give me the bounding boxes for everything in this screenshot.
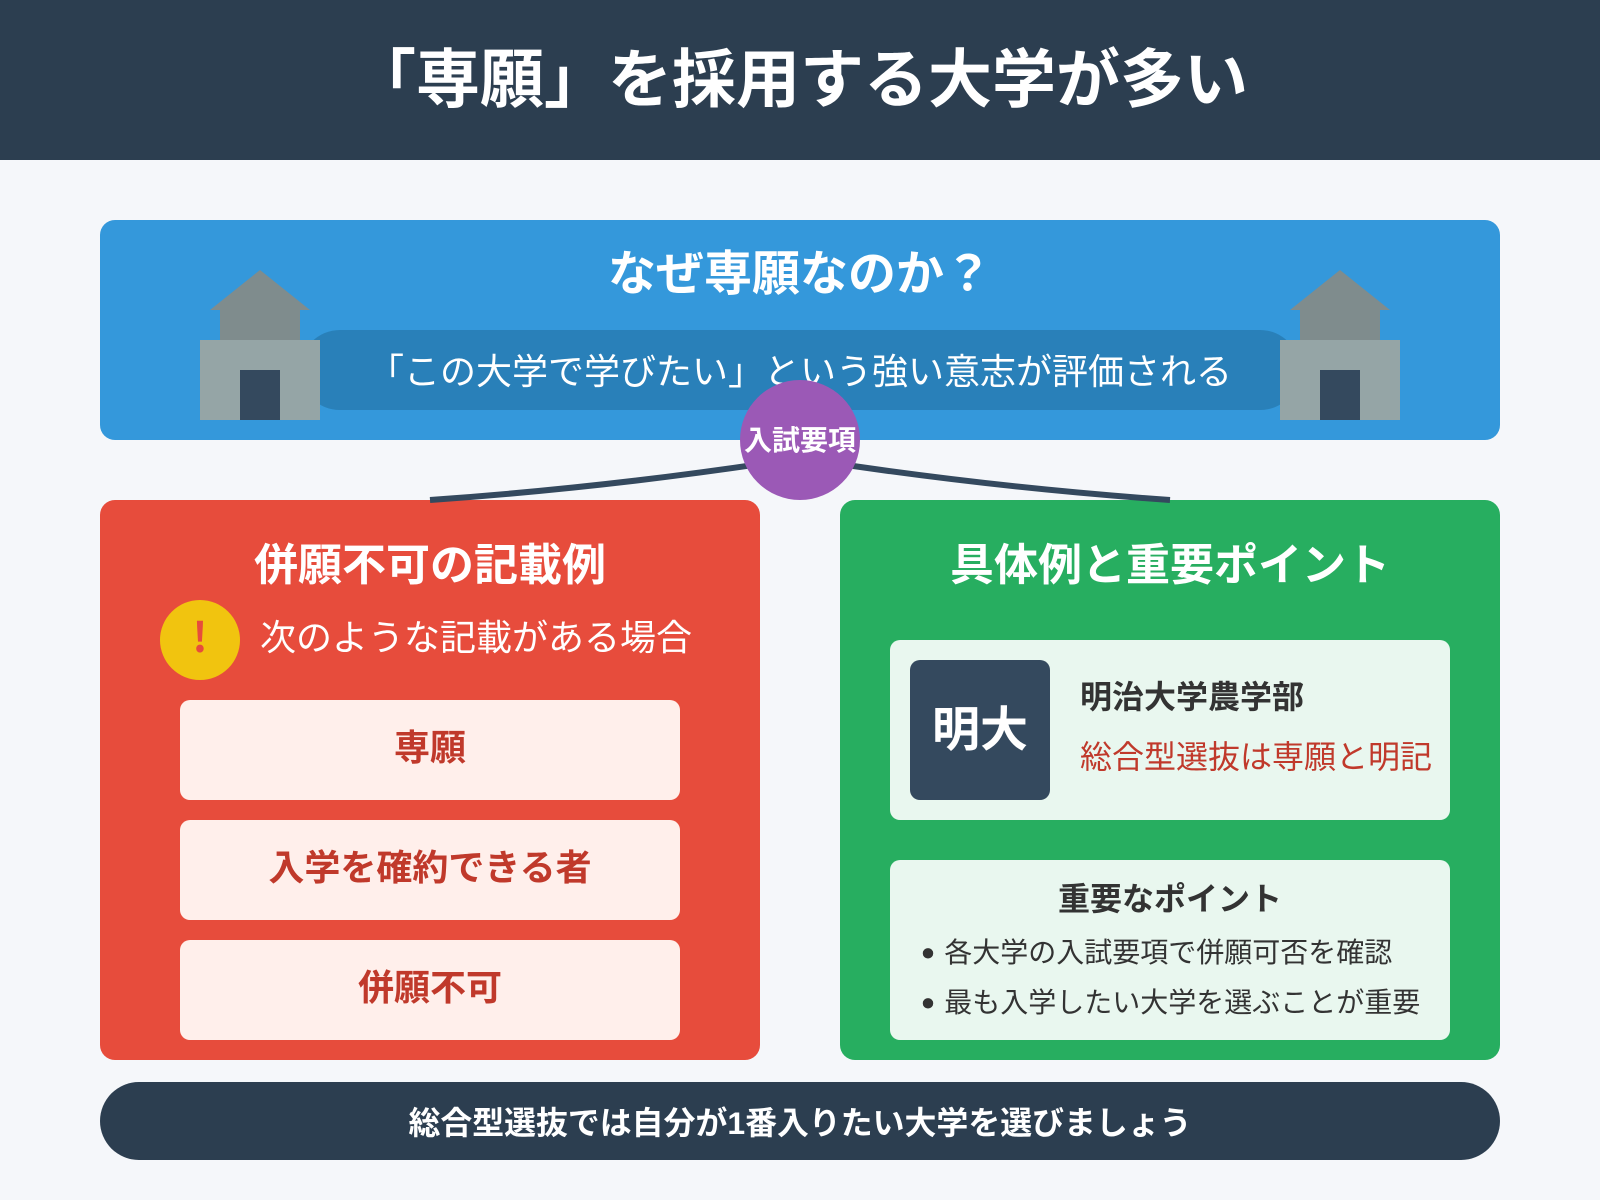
icon: warning: ! [192,604,208,664]
header band with title [0,0,1600,160]
bullet 1: • [917,935,939,976]
panel: not-allowed wording examples [100,500,760,1060]
reason pill: 「この大学で学びたい」という強い意志が評価される [368,351,1232,392]
example box 3: 併願不可 [358,967,502,1008]
connector lines from hub to panels [430,458,1170,500]
faculty name: 明治大学農学部 [1080,679,1304,715]
example box 1 [180,700,680,800]
example box 2: 入学を確約できる者 [268,847,592,888]
bullet 2: 最も入学したい大学を選ぶことが重要 [944,987,1420,1018]
panel: why senkan [100,220,1500,440]
card heading: 重要なポイント [1058,881,1282,917]
panel heading: 具体例と重要ポイント [950,541,1390,590]
reason pill [300,330,1300,410]
icon: right university building [1280,270,1400,420]
icon: warning [160,600,240,680]
example box 3 [180,940,680,1040]
footer banner: 総合型選抜では自分が1番入りたい大学を選びましょう [408,1105,1192,1141]
logo block: 明大 [932,704,1028,757]
hub: admissions guidelines: 入試要項 [744,425,856,456]
card: Meiji University example [890,640,1450,820]
panel heading: なぜ専願なのか？ [608,248,992,301]
bullet 1: 各大学の入試要項で併願可否を確認 [944,937,1392,968]
example box 2 [180,820,680,920]
intro text: 次のような記載がある場合 [260,617,692,658]
hub: admissions guidelines [740,380,860,500]
footer banner [100,1082,1500,1160]
panel: examples and key points [840,500,1500,1060]
example box 1: 専願 [394,727,466,768]
logo block [910,660,1050,800]
panel heading: 併願不可の記載例 [254,541,606,590]
title: 「専願」を採用する大学が多い [352,44,1248,116]
faculty note: 総合型選抜は専願と明記 [1080,739,1432,775]
bullet 2: • [917,985,939,1026]
icon: left university building [200,270,320,420]
card: key points [890,860,1450,1040]
